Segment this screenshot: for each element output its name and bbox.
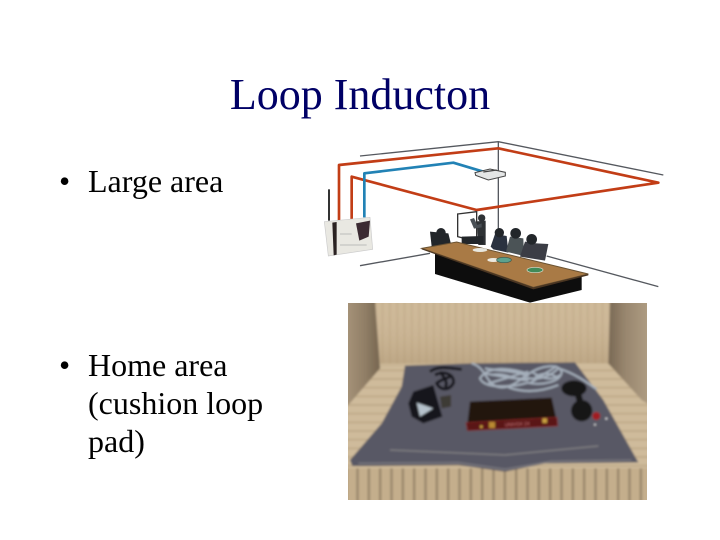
receiver box: UNIVOX 2X (505, 421, 531, 427)
bullet: home area: Home area (88, 347, 227, 383)
bullet: home area: (cushion loop (88, 385, 263, 421)
bullet: home area: pad) (88, 423, 145, 459)
room outline (360, 142, 663, 287)
presenter (470, 214, 486, 245)
receiver box (466, 398, 558, 431)
coiled wire bundle (472, 363, 597, 391)
red induction loop cable (339, 148, 658, 221)
screen (458, 212, 477, 242)
grey pad (350, 362, 638, 472)
bullet: home area: • (59, 347, 70, 383)
title: Loop Inducton (230, 70, 490, 119)
sofa right arm (608, 302, 650, 405)
bullet: large area: • (59, 163, 70, 199)
diagram: conference room with induction loop (324, 141, 664, 303)
power adapter (408, 385, 451, 423)
projector (475, 169, 505, 180)
black cable top (430, 368, 462, 389)
blue cable (364, 163, 483, 217)
sofa left arm (345, 300, 380, 405)
conference table (422, 242, 588, 303)
sofa seat (345, 362, 650, 503)
bullet: large area: Large area (88, 163, 223, 199)
photo: cushion loop pad on sofa (348, 303, 647, 500)
bullet: home area (59, 347, 263, 459)
black coiled cable (561, 380, 607, 426)
sofa back cushion (375, 302, 610, 365)
people at table (430, 228, 548, 261)
wall amplifier box (324, 189, 373, 256)
